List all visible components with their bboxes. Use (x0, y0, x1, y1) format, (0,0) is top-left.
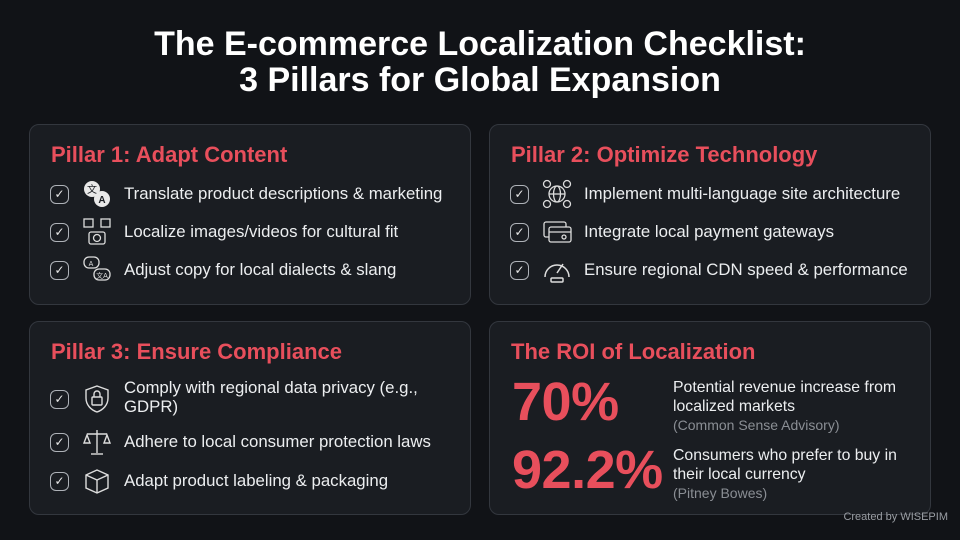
panel: pillar 2 (489, 124, 931, 305)
item: CDN (510, 260, 908, 283)
title (154, 25, 806, 99)
icon: speech bubbles (83, 256, 111, 281)
item: consumer laws (50, 430, 431, 455)
item: translate: ✓ (54, 187, 65, 201)
item: translate: Translate product descriptions & marketing (124, 184, 442, 203)
item: labeling: Adapt product labeling & packaging (124, 471, 388, 490)
item: adjust copy (50, 256, 396, 281)
item: adjust copy: Adjust copy for local dialects & slang (124, 260, 396, 279)
heading: pillar 2: Pillar 2: Optimize Technology (511, 142, 817, 167)
panel: pillar 3 (29, 321, 471, 515)
stat description 1 (673, 379, 896, 433)
icon: shield (85, 385, 109, 413)
item: localize images: Localize images/videos for cultural fit (124, 222, 398, 241)
icon: box (85, 469, 109, 494)
stat: 92.2%: 92.2% (512, 440, 663, 500)
icon: translate: A (98, 195, 106, 206)
heading: pillar 1: Pillar 1: Adapt Content (51, 142, 287, 167)
item: localize images (50, 218, 398, 245)
stat description 2: Consumers who prefer to buy in (673, 447, 897, 464)
icon: translate (84, 181, 110, 207)
item: multi-language: Implement multi-language site architecture (584, 184, 900, 203)
panel: ROI (489, 321, 931, 515)
item: CDN: Ensure regional CDN speed & performance (584, 260, 908, 279)
item: data privacy: Comply with regional data privacy (e.g., (124, 378, 418, 397)
panel: pillar 1 (29, 124, 471, 305)
stat description 2 (673, 447, 897, 501)
title: 3 Pillars for Global Expansion (239, 61, 721, 99)
icon: scales (83, 430, 111, 455)
heading: pillar 3: Pillar 3: Ensure Compliance (51, 339, 342, 364)
stat description 1: Potential revenue increase from (673, 379, 896, 396)
item: consumer laws: ✓ (54, 435, 65, 449)
stat description 2: (Pitney Bowes) (673, 485, 767, 501)
item: data privacy: ✓ (54, 392, 65, 406)
item: data privacy (50, 378, 418, 416)
item: consumer laws: Adhere to local consumer protection laws (124, 432, 431, 451)
item: multi-language: ✓ (514, 187, 525, 201)
item: multi-language (510, 180, 900, 208)
icon: speech bubbles: A (89, 261, 94, 268)
item: adjust copy: ✓ (54, 263, 65, 277)
stat description 1: localized markets (673, 398, 795, 415)
item: labeling: ✓ (54, 474, 65, 488)
item: payment (510, 221, 834, 243)
icon: globe (542, 180, 572, 208)
item: localize images: ✓ (54, 225, 65, 239)
item: payment: ✓ (514, 225, 525, 239)
icon: speedometer (544, 264, 570, 283)
item: CDN: ✓ (514, 263, 525, 277)
title: The E-commerce Localization Checklist: (154, 25, 806, 63)
icon: speech bubbles: 文A (96, 271, 108, 280)
item: translate (50, 181, 442, 207)
icon: camera (83, 218, 111, 245)
stat description 2: their local currency (673, 466, 806, 483)
stat: 70%: 70% (512, 372, 619, 432)
stat description 1: (Common Sense Advisory) (673, 417, 840, 433)
heading: ROI: The ROI of Localization (511, 339, 755, 364)
item: payment: Integrate local payment gateways (584, 222, 834, 241)
icon: card (543, 221, 572, 243)
credit: Created by WISEPIM (843, 511, 948, 523)
item: data privacy: GDPR) (124, 397, 178, 416)
icon: translate: 文 (87, 183, 97, 196)
item: labeling (50, 469, 388, 494)
